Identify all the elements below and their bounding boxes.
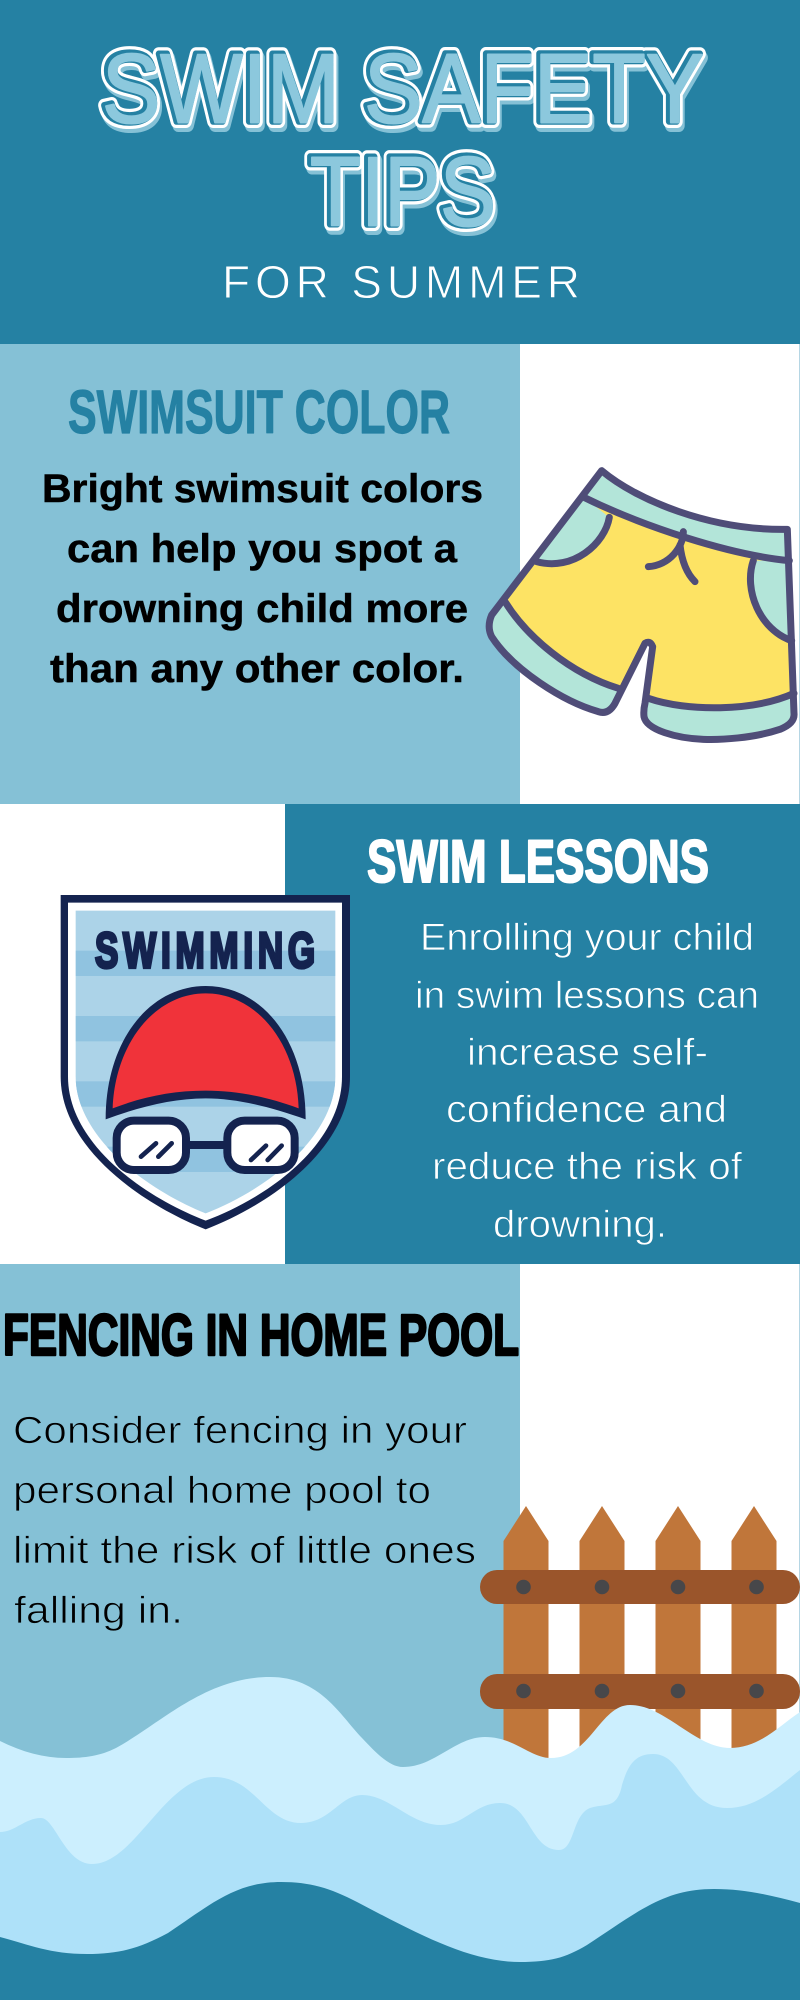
badge label: swimming: SWIMMING [95, 924, 315, 979]
text block: fencing body: Consider fencing in your [13, 1410, 467, 1452]
icon: wooden fence [480, 1506, 800, 1780]
goggles [117, 1121, 295, 1170]
text block: swimsuit color body: Bright swimsuit colors [42, 467, 483, 511]
title: swim safety tips: TIPS [308, 136, 494, 246]
heading: fencing in home pool: FENCING IN HOME POOL [3, 1303, 519, 1368]
text block: swimsuit color body: can help you spot a [67, 527, 458, 571]
text block: fencing body: limit the risk of little ones [13, 1530, 476, 1572]
title: swim safety tips: TIPS [308, 136, 494, 246]
text block: swim lessons body: increase self- [467, 1032, 708, 1074]
icon: swimming badge [61, 895, 350, 1229]
icon: swim shorts [489, 471, 794, 739]
title: swim safety tips: TIPS [310, 136, 496, 246]
text block: swimsuit color body [42, 467, 483, 691]
text block: swimsuit color body: drowning child more [56, 587, 468, 631]
heading: swimsuit color: SWIMSUIT COLOR [68, 378, 450, 446]
waves [0, 1677, 800, 2000]
swim cap [106, 986, 306, 1119]
title: swim safety tips: SWIM SAFETY [100, 32, 702, 142]
text block: swimsuit color body: than any other color. [50, 647, 464, 691]
title: swim safety tips [100, 32, 704, 250]
title: swim safety tips: TIPS [310, 140, 496, 250]
title: swim safety tips: SWIM SAFETY [100, 32, 702, 142]
subtitle: for summer: FOR SUMMER [222, 256, 580, 308]
text block: swim lessons body [415, 917, 759, 1246]
text block: fencing body: falling in. [14, 1590, 183, 1632]
panel: fencing in home pool [0, 1264, 520, 2000]
panel: swim lessons [285, 804, 800, 1264]
text block: fencing body: personal home pool to [13, 1470, 431, 1512]
title: swim safety tips: SWIM SAFETY [102, 36, 704, 146]
panel: header [0, 0, 800, 344]
text block: fencing body [13, 1410, 476, 1632]
panel: swimsuit color [0, 344, 520, 804]
title: swim safety tips: SWIM SAFETY [102, 34, 704, 144]
text block: swim lessons body: Enrolling your child [420, 917, 754, 959]
text block: swim lessons body: in swim lessons can [415, 975, 759, 1017]
text block: swim lessons body: confidence and [446, 1089, 727, 1131]
text block: swim lessons body: drowning. [493, 1204, 667, 1246]
text block: swim lessons body: reduce the risk of [432, 1146, 742, 1188]
